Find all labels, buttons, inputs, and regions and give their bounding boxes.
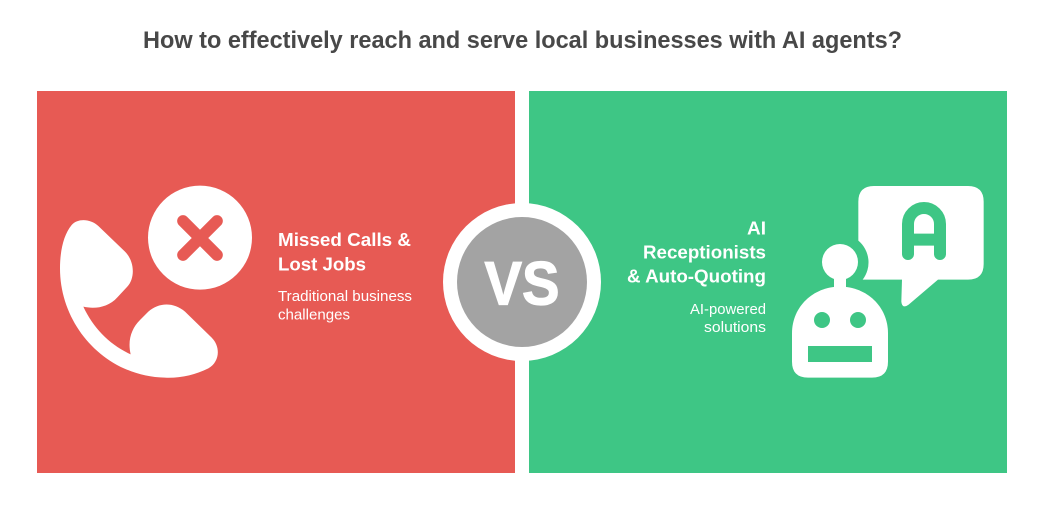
heading: AI receptionists: Receptionists [643,242,766,262]
panel background: red [37,91,515,473]
text: traditional business challenges: Traditional business [278,289,412,305]
text: AI-powered solutions [690,302,766,336]
icon: robot with speech bubble [792,186,984,378]
heading: missed calls [278,229,411,274]
text: traditional business challenges: challenges [278,308,350,324]
icon: phone handset [60,220,218,378]
heading: missed calls: Lost Jobs [278,254,366,274]
icon: phone with X badge [60,186,252,378]
heading: missed calls: Missed Calls & [278,229,411,250]
panel: missed calls [37,91,515,473]
icon: X badge [148,186,252,290]
title: How to effectively reach and serve local businesses with AI agents? [143,27,902,54]
heading: AI receptionists: & Auto-Quoting [627,266,766,286]
text: traditional business challenges [278,289,412,324]
panel: AI solutions [529,91,1007,473]
heading: AI receptionists: AI [747,218,766,238]
icon: speech bubble [858,186,984,306]
VS badge [443,203,601,361]
heading: AI receptionists [627,218,766,286]
panel background: green [529,91,1007,473]
VS badge: VS [484,250,560,318]
text: AI-powered solutions: AI-powered [690,302,766,318]
icon: robot [792,244,888,378]
text: AI-powered solutions: solutions [704,320,766,336]
